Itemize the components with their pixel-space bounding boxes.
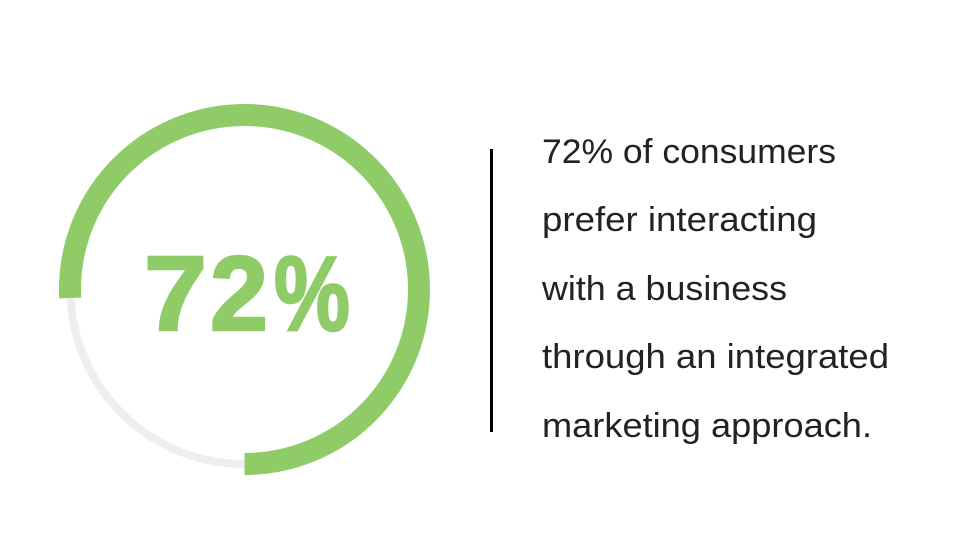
description text: through an integrated (542, 338, 889, 376)
big percentage: 7 (144, 235, 207, 353)
progress arc (70, 115, 419, 464)
description text: prefer interacting (542, 201, 817, 239)
description text: with a business (541, 270, 787, 308)
vertical divider (490, 149, 493, 432)
big percentage: % (274, 235, 350, 353)
description text: 72% of consumers (542, 133, 836, 171)
donut chart: 72% (70, 115, 419, 464)
track ring (70, 116, 418, 464)
description text: marketing approach. (542, 407, 872, 445)
description text (541, 133, 889, 445)
big percentage: 2 (210, 235, 268, 353)
